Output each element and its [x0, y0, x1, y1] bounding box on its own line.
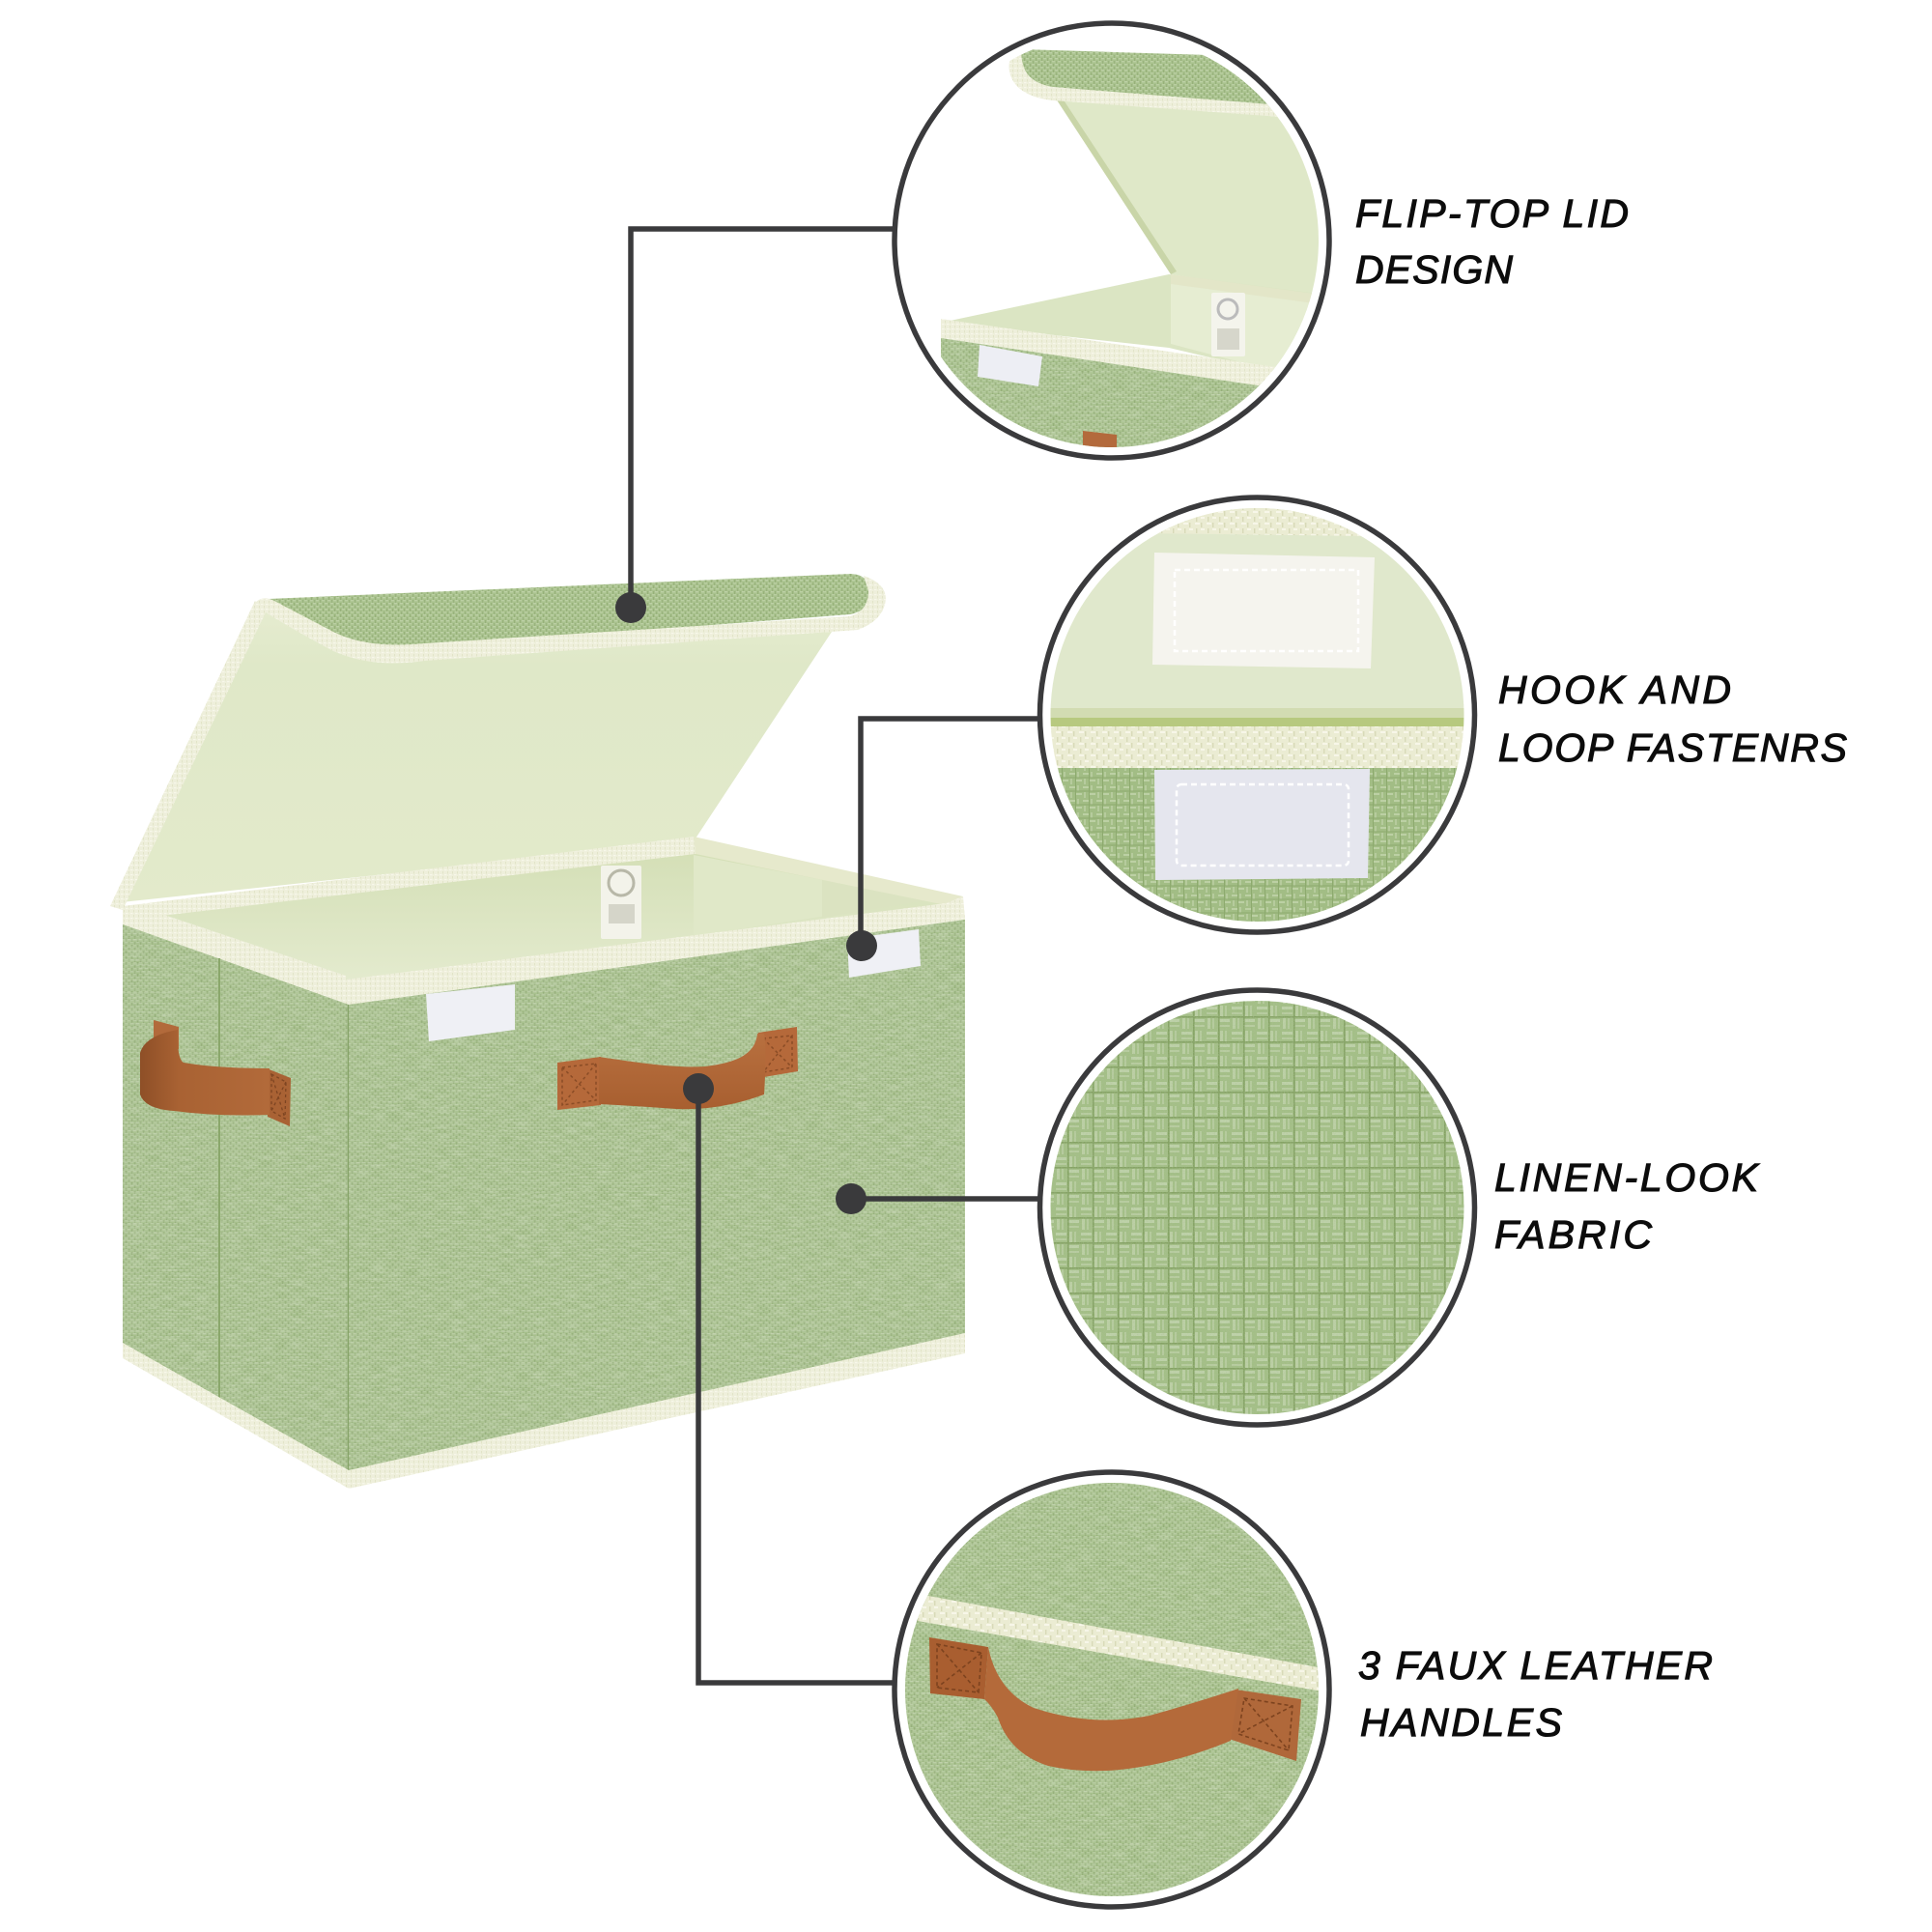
label: faux leather handles: HANDLES [1360, 1700, 1562, 1745]
detail circle: linen fabric [1039, 990, 1474, 1425]
handle strap detail [984, 1647, 1238, 1771]
label: hook and loop fasteners: HOOK AND [1498, 668, 1731, 712]
front rim detail [941, 319, 1290, 390]
label: flip-top lid design: FLIP-TOP LID [1355, 191, 1629, 236]
linen weave texture [1050, 1001, 1464, 1414]
lid trim detail [1009, 54, 1277, 117]
lid left edge trim [110, 601, 266, 910]
lower fabric detail [898, 1478, 1328, 1903]
label: hook and loop fasteners: LOOP FASTENRS [1498, 725, 1847, 770]
rim trim band detail [1043, 726, 1468, 768]
connector: hook and loop [846, 719, 1038, 961]
connector: linen fabric [836, 1183, 1041, 1214]
detail circle: flip-top lid [895, 23, 1352, 483]
connector: leather handles [683, 1073, 896, 1683]
side handle [140, 1020, 291, 1126]
box left face [123, 924, 349, 1478]
label: hook and loop fasteners [1498, 668, 1847, 770]
leather detail [1083, 431, 1117, 447]
velcro loop tab [1154, 769, 1370, 880]
handle patch right [1229, 1690, 1301, 1761]
detail circle: hook and loop [1039, 497, 1474, 932]
back rim trim [123, 837, 696, 916]
velcro tab left [426, 984, 515, 1041]
front fabric detail [941, 338, 1265, 447]
lid trim band detail [1159, 508, 1360, 536]
label: linen-look fabric [1494, 1155, 1760, 1257]
box front face [349, 920, 965, 1478]
velcro detail [978, 345, 1042, 386]
care label detail [1211, 293, 1245, 356]
label: linen-look fabric: FABRIC [1494, 1212, 1652, 1257]
cream rim detail [918, 1594, 1328, 1692]
handle left patch [557, 1057, 601, 1110]
side handle patch [267, 1068, 291, 1126]
interior back wall detail [952, 274, 1312, 372]
lid underside detail [1057, 100, 1319, 294]
label: flip-top lid design [1355, 191, 1629, 292]
box lid underside [112, 606, 832, 903]
right rim trim [694, 837, 963, 905]
side handle strap [140, 1030, 270, 1115]
box interior right wall [694, 855, 927, 936]
handle strap [599, 1034, 765, 1109]
label: linen-look fabric: LINEN-LOOK [1494, 1155, 1760, 1200]
connector: flip-top lid [615, 229, 894, 623]
left rim trim [123, 906, 349, 1007]
label: flip-top lid design: DESIGN [1355, 247, 1513, 292]
lid lining detail [1043, 507, 1468, 715]
detail circle: leather handle [895, 1472, 1329, 1907]
product: storage box with open lid [110, 574, 965, 1489]
care label [601, 866, 641, 939]
velcro hook tab [1152, 553, 1375, 668]
lid top surface [269, 574, 871, 649]
box interior back wall [123, 850, 947, 985]
label: faux leather handles: 3 FAUX LEATHER [1358, 1643, 1713, 1688]
front handle [557, 1027, 798, 1110]
lid top detail [1018, 49, 1271, 108]
front rim trim [346, 896, 965, 1007]
lid front edge trim [255, 576, 886, 663]
green fabric detail [1057, 768, 1457, 922]
handle right patch [758, 1027, 798, 1078]
bottom trim [123, 1333, 965, 1489]
velcro tab right [847, 929, 921, 978]
handle patch left [929, 1637, 988, 1699]
label: faux leather handles [1358, 1643, 1713, 1745]
